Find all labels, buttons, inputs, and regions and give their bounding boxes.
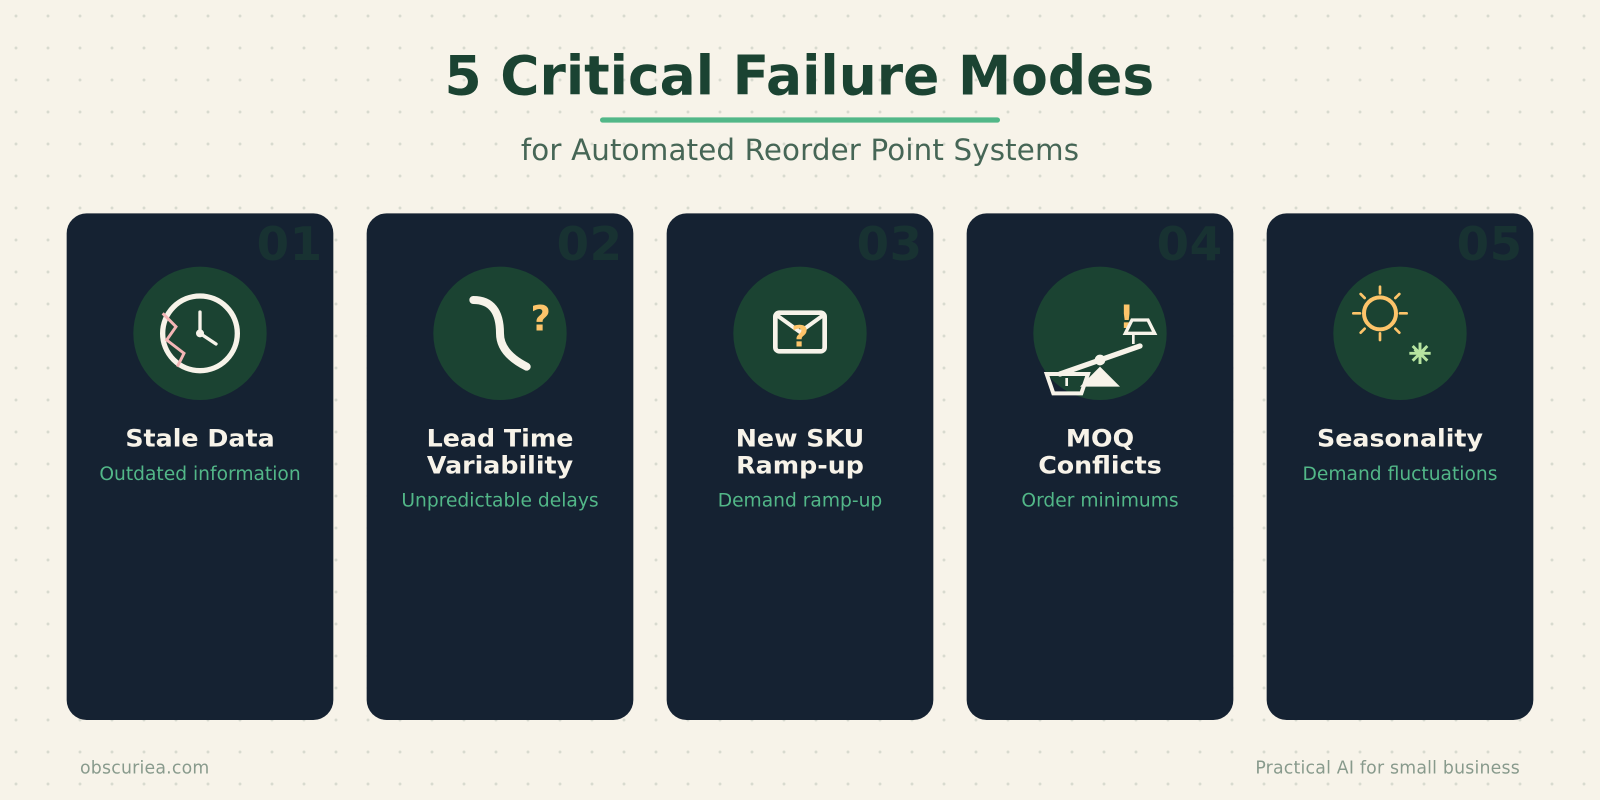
heading: moq conflicts: MOQ bbox=[1066, 424, 1134, 453]
icon: wavy line with question mark: ? bbox=[531, 300, 551, 340]
subtitle: for Automated Reorder Point Systems bbox=[521, 133, 1079, 167]
panel: card 4 moq conflicts bbox=[967, 213, 1233, 720]
text: order minimums: Order minimums bbox=[1021, 491, 1179, 512]
number 05: 05 bbox=[1457, 218, 1523, 272]
panel: card 4 moq conflicts: Conflicts bbox=[1038, 451, 1162, 479]
icon: envelope with question mark bbox=[733, 267, 867, 400]
text: unpredictable delays: Unpredictable delays bbox=[401, 491, 599, 512]
panel: card 3 new sku ramp-up: Ramp-up bbox=[736, 451, 864, 479]
icon: wavy line with question mark bbox=[433, 267, 567, 400]
icon: envelope with question mark: ? bbox=[791, 320, 809, 354]
heading: lead time variability: Lead Time bbox=[427, 424, 573, 453]
text: demand fluctuations: Demand fluctuations bbox=[1303, 464, 1497, 485]
number 01: 01 bbox=[257, 218, 323, 272]
icon: cracked clock bbox=[133, 267, 267, 400]
heading: seasonality: Seasonality bbox=[1317, 424, 1483, 453]
number 02: 02 bbox=[557, 218, 623, 272]
panel: card 5 seasonality bbox=[1267, 213, 1533, 720]
heading: stale data: Stale Data bbox=[125, 424, 275, 453]
title underline bbox=[600, 117, 1000, 123]
panel: card 2 lead time variability bbox=[367, 213, 633, 720]
icon: sun and snowflake bbox=[1333, 267, 1467, 400]
title: 5 Critical Failure Modes bbox=[444, 44, 1154, 108]
icon: unbalanced scale bbox=[1033, 267, 1167, 400]
number 04: 04 bbox=[1157, 218, 1223, 272]
number 03: 03 bbox=[857, 218, 923, 272]
footer left: obscuriea.com bbox=[80, 758, 209, 778]
text: demand ramp-up: Demand ramp-up bbox=[718, 491, 882, 512]
icon: unbalanced scale: ! bbox=[1119, 298, 1134, 336]
footer right: Practical AI for small business bbox=[1255, 758, 1520, 778]
panel: card 3 new sku ramp-up bbox=[667, 213, 933, 720]
text: outdated information: Outdated information bbox=[99, 464, 301, 485]
panel: card 1 stale data bbox=[67, 213, 333, 720]
panel: card 2 lead time variability: Variability bbox=[427, 451, 573, 479]
heading: new sku ramp-up: New SKU bbox=[736, 424, 864, 453]
